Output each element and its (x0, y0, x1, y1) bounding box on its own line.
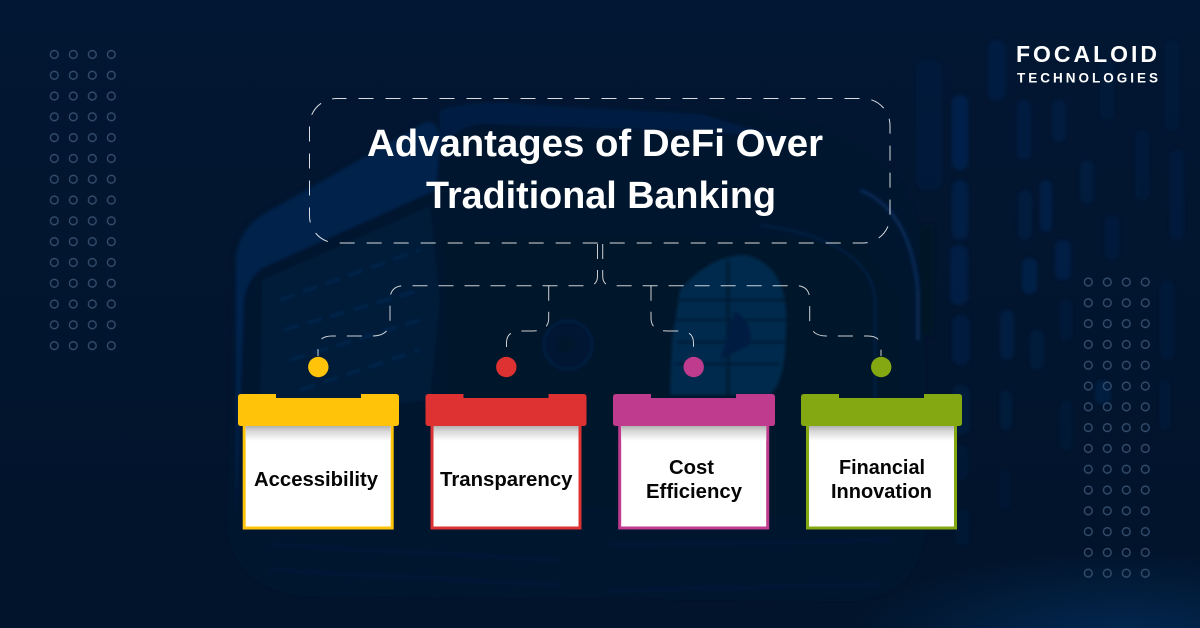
card label: Accessibility (254, 469, 379, 491)
card cap (801, 394, 962, 426)
dashed connectors (318, 244, 881, 356)
card cap (426, 394, 586, 426)
node dot: Transparency (496, 357, 516, 377)
decorative dot grid: right (1079, 272, 1155, 584)
logo tagline: TECHNOLOGIES (1017, 70, 1158, 85)
card label: Cost (669, 457, 714, 479)
card cap (238, 394, 399, 426)
card body (244, 420, 392, 528)
card: Accessibility (238, 394, 399, 528)
node dot: Financial Innovation (871, 357, 891, 377)
node dot: Accessibility (308, 357, 328, 377)
card body (620, 420, 768, 528)
logo wordmark: FOCALOID (1016, 41, 1157, 67)
background: teal bitcoin emblem (670, 255, 786, 395)
background: hardware device (228, 103, 934, 600)
card label: Efficiency (646, 481, 743, 503)
background: digital code columns (916, 40, 1184, 545)
connector to Financial Innovation (603, 244, 881, 356)
title line 1: Advantages of DeFi Over (367, 123, 823, 165)
card label: Transparency (440, 469, 573, 491)
decorative dot grid: left (45, 44, 121, 356)
connector to Cost Efficiency (651, 286, 694, 356)
card: Financial Innovation (801, 394, 962, 528)
card body (808, 420, 956, 528)
card: Cost Efficiency (613, 394, 775, 528)
connector to Transparency (506, 286, 549, 356)
card body (432, 420, 580, 528)
card label: Financial (839, 457, 925, 479)
title box: dashed outline (310, 98, 890, 243)
card: Transparency (426, 394, 586, 528)
title line 2: Traditional Banking (426, 175, 776, 217)
connector to Accessibility (318, 244, 598, 356)
card label: Innovation (831, 481, 932, 503)
logo (1016, 41, 1158, 85)
card cap (613, 394, 775, 426)
title (367, 123, 823, 217)
node dot: Cost Efficiency (684, 357, 704, 377)
